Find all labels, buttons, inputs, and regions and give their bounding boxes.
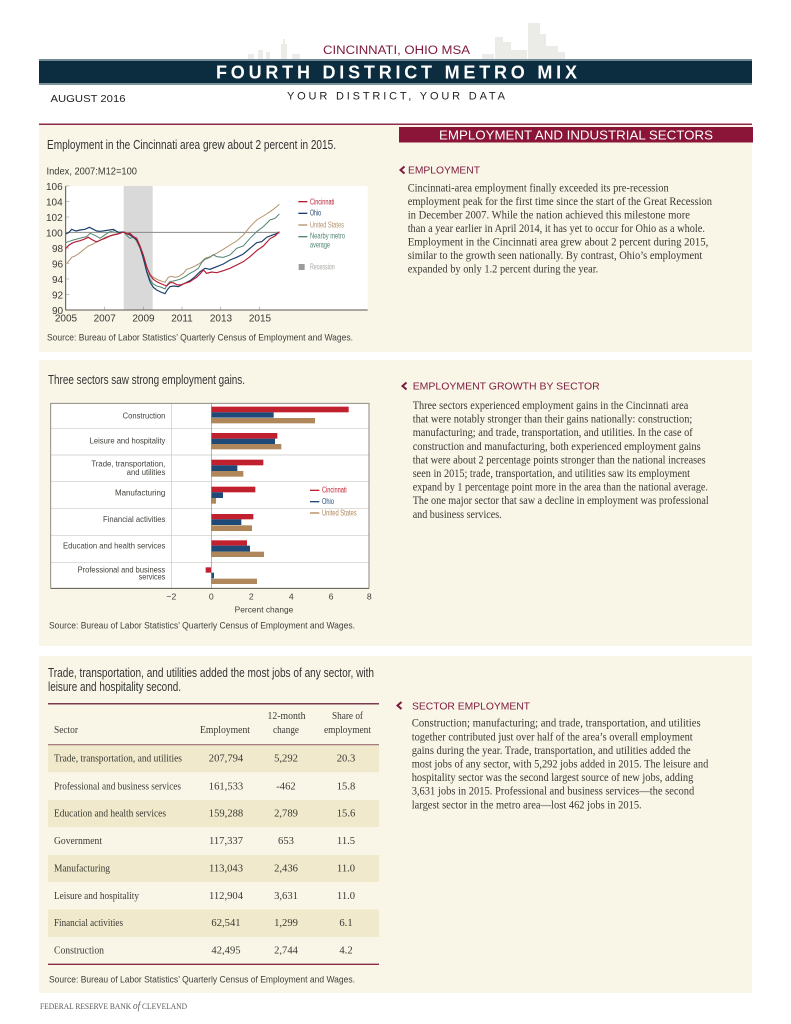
row: Leisure and hospitality: 3,631: [274, 891, 298, 902]
chart heading: Three sectors saw strong employment gains.: [48, 373, 245, 387]
sector labels: Manufacturing: [115, 487, 166, 497]
text block: employment: in December 2007. While the nation achieved this milestone more: [408, 210, 690, 222]
table heading: Trade, transportation, and utilities added the most jobs of any sector, with: [48, 666, 374, 680]
sector labels: Trade, transportation,: [91, 458, 165, 468]
icon: city skyline: [248, 23, 565, 60]
subheading: sector employment: SECTOR EMPLOYMENT: [412, 700, 531, 712]
sector labels: Leisure and hospitality: [90, 435, 166, 445]
line: Cincinnati: [66, 232, 279, 286]
text block: employment: Employment in the Cincinnati area grew about 2 percent during 2015,: [408, 236, 708, 248]
chart axis labels: 96: [52, 260, 64, 270]
row: Construction: [54, 946, 353, 956]
text block: sector employment: largest sector in the metro area—lost 462 jobs in 2015.: [412, 799, 642, 811]
chart axis labels: 2005: [55, 314, 78, 325]
section banner: EMPLOYMENT AND INDUSTRIAL SECTORS: [439, 128, 713, 142]
bars: Leisure and hospitality: [211, 433, 281, 449]
row: Leisure and hospitality: [54, 891, 355, 902]
bars: Education and health services: [211, 540, 264, 557]
chart axis labels: 2007: [94, 314, 116, 325]
bars: Financial activities: [211, 514, 253, 531]
bars: Construction: [211, 407, 349, 423]
text block: employment growth by sector: [413, 400, 709, 521]
line chart: employment index: [66, 186, 368, 310]
row: Education and health services: 159,288: [209, 809, 243, 820]
legend: [298, 197, 345, 272]
text block: employment growth by sector: construction and manufacturing, both experienced employment gains: [413, 441, 701, 453]
source note: Source: Bureau of Labor Statistics’ Quarterly Census of Employment and Wages.: [49, 975, 355, 985]
bar chart: employment growth by sector: [51, 403, 372, 615]
sector labels: Professional and business: [78, 565, 165, 575]
chart axis title: Index, 2007:M12=100: [46, 167, 137, 178]
table heading: [48, 666, 374, 694]
text block: sector employment: together contributed just over half of the area’s overall employment: [412, 731, 693, 743]
row: Trade, transportation, and utilities: Trade, transportation, and utilities: [54, 754, 182, 765]
chart axis labels: 100: [46, 228, 63, 240]
row: Government: [54, 836, 355, 847]
text block: sector employment: [412, 718, 709, 811]
subheading: employment: EMPLOYMENT: [408, 165, 481, 177]
title banner: [39, 59, 752, 85]
table header: employment: [324, 725, 371, 736]
chart axis labels: 90: [52, 306, 64, 317]
panel: employment growth by sector: [39, 360, 752, 646]
bars: Professional and business services: [206, 567, 257, 584]
source note: Source: Bureau of Labor Statistics’ Quarterly Census of Employment and Wages.: [49, 621, 355, 631]
row: Trade, transportation, and utilities: 20.3: [337, 754, 355, 765]
sector labels: services: [139, 572, 165, 582]
line: Ohio: [66, 227, 279, 294]
text block: employment growth by sector: that were about 2 percentage points stronger than the national increases: [413, 454, 706, 466]
sector labels: and utilities: [127, 467, 165, 477]
row: Trade, transportation, and utilities: 207,794: [209, 754, 244, 765]
text block: employment growth by sector: Three sectors experienced employment gains in the Cincinnati area: [413, 400, 688, 412]
chart axis labels: 2015: [249, 314, 272, 325]
row: Education and health services: Education and health services: [54, 809, 166, 820]
text block: employment growth by sector: that were notably stronger than their gains nationally: construction;: [413, 414, 692, 426]
row: Government: 11.5: [337, 836, 355, 847]
text block: employment: similar to the growth seen nationally. By contrast, Ohio’s employment: [408, 250, 703, 262]
legend: Nearby metro: [310, 232, 345, 241]
row: Education and health services: [54, 809, 355, 820]
table header: 12-month: [268, 711, 306, 722]
row: Financial activities: [54, 918, 353, 929]
text block: employment: [408, 182, 712, 276]
row: Government: 653: [278, 836, 294, 847]
table header: Employment: [200, 725, 250, 736]
panel: employment: [39, 124, 753, 352]
table header: change: [273, 725, 299, 736]
text block: employment: employment peak for the first time since the start of the Great Recession: [408, 196, 712, 208]
line: Nearby metro average: [66, 214, 279, 289]
panel: sector employment: [39, 656, 752, 993]
chart axis labels: 2011: [171, 314, 193, 325]
footer logotype: FEDERAL RESERVE BANK of CLEVELAND: [40, 1001, 187, 1012]
row: Financial activities: 62,541: [211, 918, 241, 929]
row: Construction: 4.2: [339, 946, 353, 956]
row: Professional and business services: 15.8: [337, 781, 355, 792]
text block: employment: expanded by only 1.2 percent during the year.: [408, 264, 598, 276]
chart axis labels: 92: [52, 290, 64, 302]
text block: employment: than a year earlier in April 2014, it has yet to occur for Ohio as a whole.: [408, 223, 705, 235]
row: Financial activities: 6.1: [339, 918, 353, 929]
legend: United States: [310, 220, 344, 229]
subtitle: YOUR DISTRICT, YOUR DATA: [287, 90, 506, 102]
section banner: [399, 127, 753, 142]
line: United States: [66, 204, 279, 282]
row: Education and health services: 2,789: [274, 809, 298, 820]
legend: average: [310, 240, 330, 249]
text block: sector employment: Construction; manufacturing; and trade, transportation, and utilities: [412, 718, 701, 730]
text block: sector employment: 3,631 jobs in 2015. Professional and business services—the second: [412, 786, 695, 798]
chart axis labels: 2009: [132, 314, 155, 325]
row: Professional and business services: 161,533: [209, 781, 243, 792]
legend: United States: [322, 508, 357, 517]
sector labels: [63, 411, 166, 582]
sector labels: Construction: [123, 411, 166, 421]
chart axis labels: 2013: [210, 314, 233, 325]
axis labels: 2: [249, 591, 254, 601]
row: Construction: Construction: [54, 946, 105, 956]
row: Financial activities: Financial activities: [54, 918, 123, 929]
table header: Share of: [332, 711, 363, 722]
axis labels: 0: [209, 591, 214, 601]
row: Financial activities: 1,299: [274, 918, 298, 929]
axis labels: [166, 591, 372, 601]
metro label: CINCINNATI, OHIO MSA: [323, 45, 470, 57]
sector labels: Education and health services: [63, 540, 165, 550]
legend: [310, 486, 357, 517]
row: Government: Government: [54, 836, 102, 847]
row: Trade, transportation, and utilities: 5,292: [274, 754, 298, 765]
subheading: employment growth by sector: EMPLOYMENT GROWTH BY SECTOR: [413, 381, 600, 393]
date: AUGUST 2016: [50, 93, 126, 105]
row: Education and health services: 15.6: [337, 809, 355, 820]
text block: employment growth by sector: seen in 2015; trade, transportation, and utilities saw its employment: [413, 468, 691, 480]
row: Leisure and hospitality: 11.0: [337, 891, 355, 902]
chart axis labels: 106: [46, 182, 63, 193]
row: Manufacturing: 113,043: [209, 864, 243, 874]
table heading: leisure and hospitality second.: [48, 680, 181, 694]
row: Construction: 2,744: [274, 946, 299, 956]
text block: employment growth by sector: expand by 1 percentage point more in the area than the national average.: [413, 482, 708, 494]
row: Professional and business services: -462: [276, 781, 296, 792]
row: Professional and business services: Professional and business services: [54, 781, 181, 792]
row: Manufacturing: 2,436: [274, 864, 298, 874]
legend: Cincinnati: [322, 486, 347, 495]
row: Professional and business services: [54, 781, 355, 792]
text block: employment: Cincinnati-area employment finally exceeded its pre-recession: [408, 182, 669, 194]
chart heading: Employment in the Cincinnati area grew about 2 percent in 2015.: [47, 138, 336, 152]
text block: employment growth by sector: manufacturing; and trade, transportation, and utilities. In the case of: [413, 427, 693, 439]
row: Manufacturing: [54, 864, 355, 874]
row: Construction: 42,495: [211, 946, 241, 956]
legend: Recession: [310, 263, 335, 272]
text block: sector employment: gains during the year. Trade, transportation, and utilities added the: [412, 745, 691, 757]
row: Manufacturing: 11.0: [337, 864, 355, 874]
row: Leisure and hospitality: 112,904: [209, 891, 244, 902]
row: Trade, transportation, and utilities: [54, 754, 355, 765]
chart axis labels: [46, 182, 272, 325]
legend: Ohio: [322, 497, 334, 506]
legend: Ohio: [310, 209, 321, 218]
row: Leisure and hospitality: Leisure and hospitality: [54, 891, 140, 902]
table header: Sector: [54, 725, 78, 736]
text block: employment growth by sector: The one major sector that saw a decline in employment was professional: [413, 495, 709, 507]
sector labels: Financial activities: [103, 514, 165, 524]
chart axis labels: 104: [46, 198, 63, 208]
chart axis labels: 94: [52, 275, 64, 286]
axis labels: 8: [367, 591, 372, 601]
row: Government: 117,337: [209, 836, 243, 847]
axis labels: 6: [329, 591, 334, 601]
title banner: FOURTH DISTRICT METRO MIX: [216, 62, 577, 82]
row: Manufacturing: Manufacturing: [54, 864, 111, 874]
source note: Source: Bureau of Labor Statistics’ Quarterly Census of Employment and Wages.: [47, 333, 353, 343]
axis labels: −2: [166, 591, 176, 601]
text block: sector employment: most jobs of any sector, with 5,292 jobs added in 2015. The leisure and: [412, 758, 709, 770]
text block: sector employment: hospitality sector was the second largest source of new jobs, adding: [412, 772, 694, 784]
table header: [54, 711, 371, 736]
legend: Cincinnati: [310, 197, 334, 206]
bars: Manufacturing: [211, 487, 255, 504]
chart axis labels: 102: [46, 213, 63, 224]
axis title: Percent change: [235, 605, 294, 615]
text block: employment growth by sector: and business services.: [413, 509, 502, 521]
table: sector employment: [48, 704, 379, 964]
axis labels: 4: [289, 591, 294, 601]
bars: Trade, transportation, and utilities: [211, 460, 263, 477]
chart axis labels: 98: [52, 244, 64, 255]
